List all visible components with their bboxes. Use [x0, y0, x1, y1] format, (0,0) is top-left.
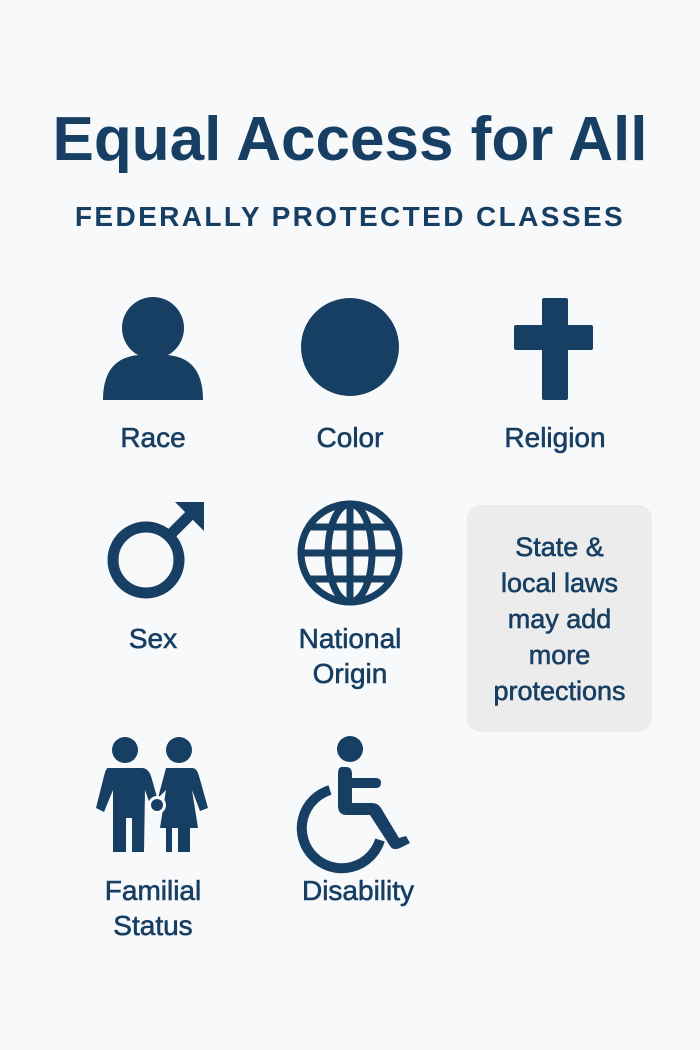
callout: state laws: may add — [508, 604, 611, 634]
title: Equal Access for All — [53, 105, 647, 174]
icon: race — [103, 297, 203, 400]
label: race: Race — [120, 422, 186, 453]
icon: sex — [113, 502, 204, 593]
callout: state laws: protections — [493, 676, 626, 706]
icon: family — [96, 737, 208, 852]
label: sex: Sex — [129, 623, 177, 654]
label: national origin — [299, 623, 401, 690]
icon: color — [301, 298, 399, 396]
label: familial status: Familial — [105, 875, 201, 906]
icon: globe — [301, 504, 399, 602]
icon: religion cross — [514, 298, 593, 400]
label: national origin: National — [299, 623, 401, 654]
callout: state laws — [467, 505, 652, 732]
label: familial status: Status — [113, 910, 193, 941]
label: color: Color — [317, 422, 383, 453]
subtitle: FEDERALLY PROTECTED CLASSES — [75, 201, 625, 232]
label: national origin: Origin — [313, 658, 387, 689]
icon: wheelchair — [302, 736, 410, 868]
callout: state laws: more — [529, 640, 590, 670]
callout: state laws: State & — [515, 532, 604, 562]
callout: state laws: local laws — [501, 568, 618, 598]
label: familial status — [105, 875, 201, 941]
label: disability: Disability — [302, 875, 414, 906]
label: religion: Religion — [504, 422, 606, 453]
